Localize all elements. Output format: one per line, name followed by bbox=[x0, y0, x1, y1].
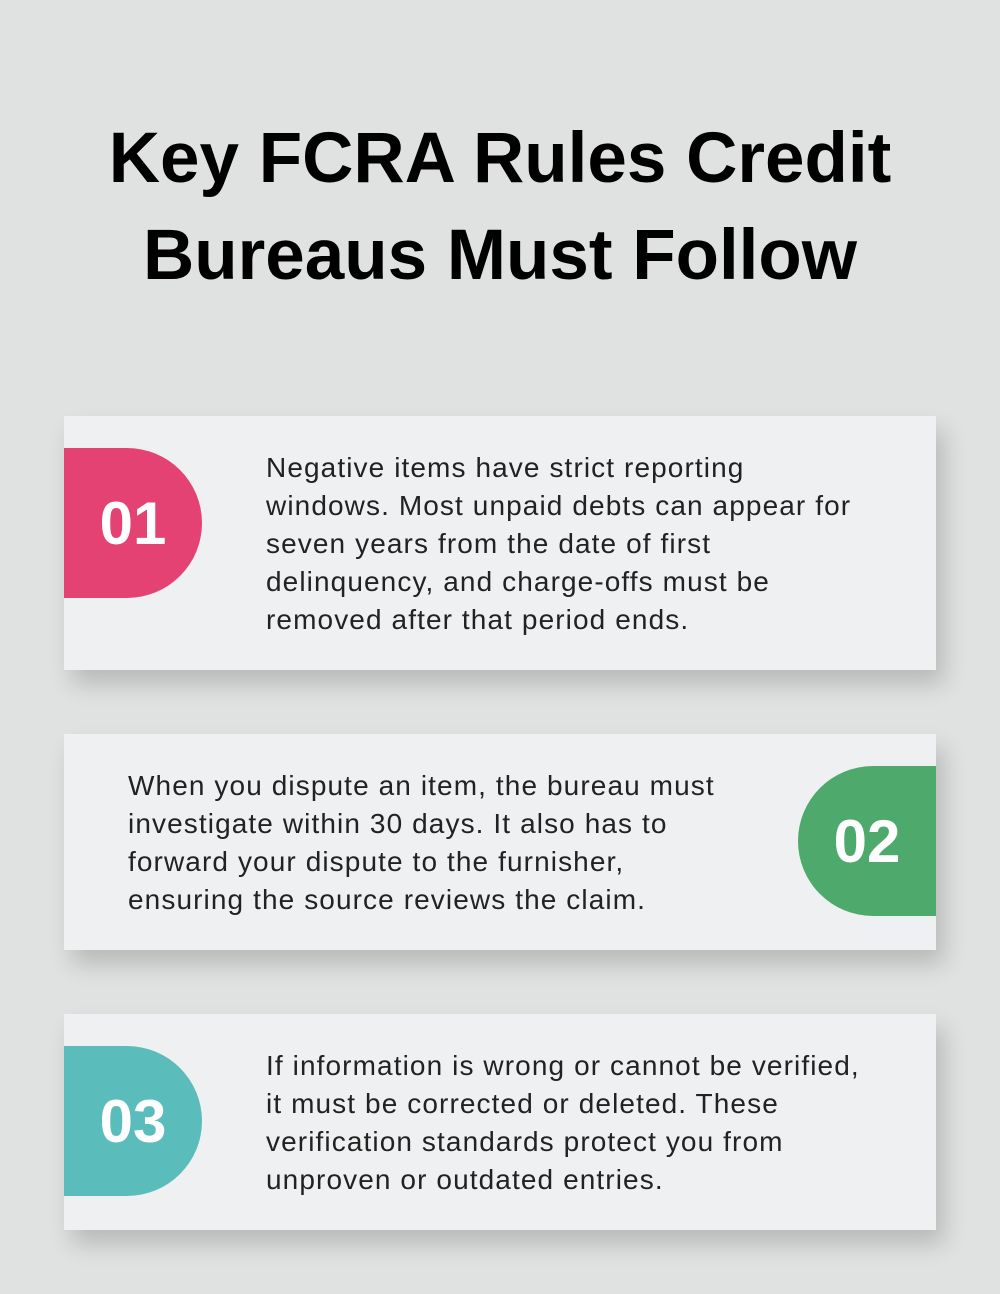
text 02: ensuring the source reviews the claim. bbox=[128, 884, 646, 915]
badge 03 bbox=[64, 1046, 202, 1196]
text 01: delinquency, and charge-offs must be bbox=[266, 566, 770, 597]
text 03: verification standards protect you from bbox=[266, 1126, 784, 1157]
badge 01 bbox=[64, 448, 202, 598]
text 03: unproven or outdated entries. bbox=[266, 1164, 664, 1195]
badge 03: 03 bbox=[100, 1088, 166, 1154]
text 01 bbox=[266, 452, 851, 635]
text 03 bbox=[266, 1050, 860, 1195]
title: Bureaus Must Follow bbox=[143, 216, 857, 295]
text 01: seven years from the date of first bbox=[266, 528, 711, 559]
panel: rule 02 bbox=[64, 734, 936, 950]
text 01: Negative items have strict reporting bbox=[266, 452, 744, 483]
text 03: it must be corrected or deleted. These bbox=[266, 1088, 779, 1119]
text 01: removed after that period ends. bbox=[266, 604, 689, 635]
text 02: When you dispute an item, the bureau must bbox=[128, 770, 715, 801]
text 01: windows. Most unpaid debts can appear for bbox=[266, 490, 851, 521]
title bbox=[109, 119, 891, 295]
text 02: forward your dispute to the furnisher, bbox=[128, 846, 624, 877]
badge 01: 01 bbox=[100, 490, 166, 556]
text 03: If information is wrong or cannot be verified, bbox=[266, 1050, 860, 1081]
title: Key FCRA Rules Credit bbox=[109, 119, 891, 198]
panel: rule 01 bbox=[64, 416, 936, 670]
text 02: investigate within 30 days. It also has to bbox=[128, 808, 668, 839]
badge 02 bbox=[798, 766, 936, 916]
badge 02: 02 bbox=[834, 808, 900, 874]
panel: rule 03 bbox=[64, 1014, 936, 1230]
text 02 bbox=[128, 770, 715, 915]
